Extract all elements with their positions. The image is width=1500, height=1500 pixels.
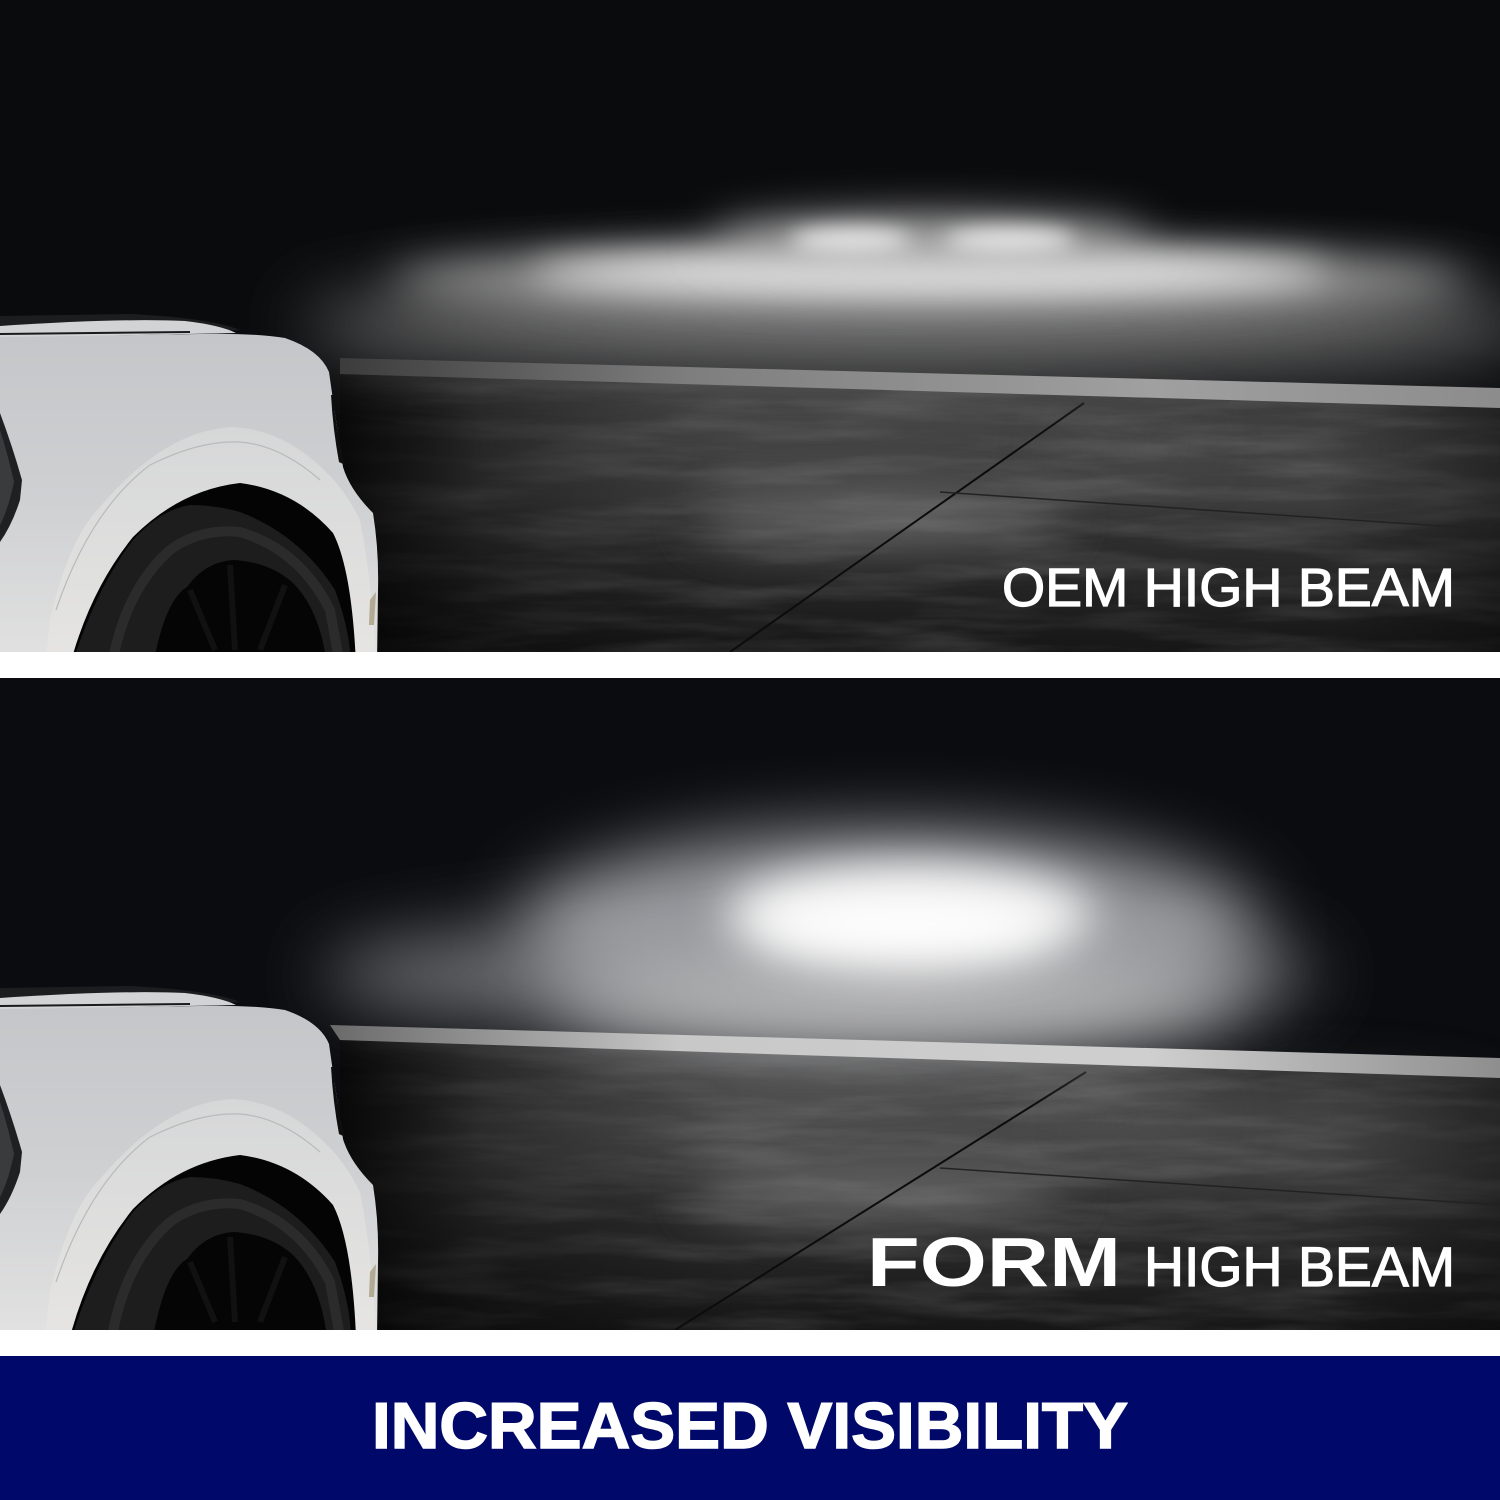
floor bbox=[340, 374, 1500, 652]
label: OEM high beam: OEM HIGH BEAM bbox=[1002, 558, 1455, 618]
dark wall background bbox=[0, 678, 1500, 1115]
panel: OEM high beam bbox=[0, 0, 1500, 665]
panel: FORM high beam bbox=[0, 678, 1500, 1337]
floor bbox=[340, 1040, 1500, 1330]
beam: hot spot bbox=[530, 252, 1330, 292]
beam: wide outer glow bbox=[320, 915, 1320, 1035]
banner heading: INCREASED VISIBILITY bbox=[372, 1389, 1128, 1462]
wall base strip bbox=[340, 358, 1500, 408]
lower wall glow bbox=[550, 964, 1250, 1036]
lower wall glow bbox=[300, 277, 1500, 373]
wall base strip bbox=[330, 1025, 1500, 1078]
vehicle: front fender and wheel bbox=[0, 986, 378, 1337]
label: FORM logo: FORM bbox=[867, 1223, 1121, 1301]
beam: hot spot bbox=[725, 863, 1095, 967]
dark wall background bbox=[0, 0, 1500, 443]
label: high beam: HIGH BEAM bbox=[1144, 1235, 1455, 1298]
vehicle: front fender and wheel bbox=[0, 314, 378, 665]
banner: increased visibility bbox=[0, 1356, 1500, 1500]
beam: outer glow bbox=[390, 250, 1470, 310]
